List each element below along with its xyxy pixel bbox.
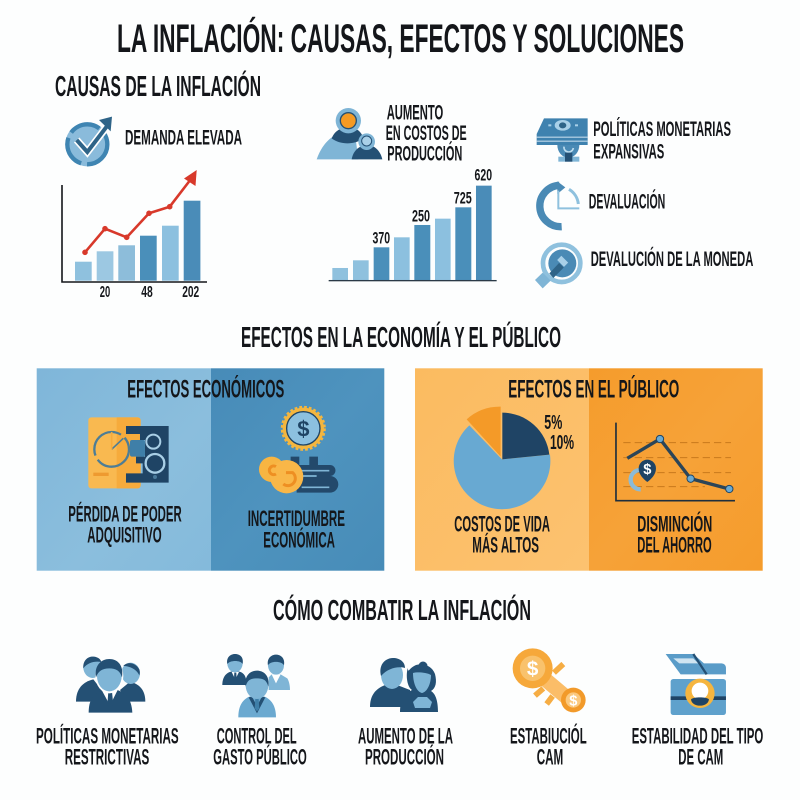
label: disminción del ahorro bbox=[637, 512, 712, 557]
icon: linked coins bbox=[513, 648, 586, 712]
pie labels: 10% bbox=[550, 432, 574, 454]
label: incertidumbre económica: INCERTIDUMBRE bbox=[248, 506, 345, 531]
label: incertidumbre económica bbox=[248, 506, 345, 552]
label: disminción del ahorro: DISMINCIÓN bbox=[637, 512, 712, 537]
bar chart: costos: 250 bbox=[412, 208, 430, 226]
bar chart with red trend line: 20 bbox=[100, 284, 110, 301]
icon: gear coin and pipes: $ bbox=[297, 416, 309, 441]
section: causas de la inflación bbox=[55, 71, 753, 301]
panel: efectos en el público: DEL AHORRO bbox=[637, 532, 712, 557]
line chart: ahorro: $ bbox=[643, 462, 651, 478]
label: políticas monetarias expansivas bbox=[593, 116, 731, 163]
bar chart: costos: 725 bbox=[454, 189, 472, 207]
label: políticas monetarias restrictivas bbox=[36, 723, 179, 769]
line chart: ahorro bbox=[616, 423, 735, 501]
label: políticas monetarias restrictivas: RESTRICTIVAS bbox=[65, 744, 149, 769]
icon: linked coins: $ bbox=[569, 693, 577, 709]
label: aumento de la producción: AUMENTO DE LA bbox=[358, 723, 453, 748]
heading: causas: CAUSAS DE LA INFLACIÓN bbox=[55, 71, 261, 103]
label: aumento de la producción: PRODUCCIÓN bbox=[365, 744, 444, 769]
label: estabilidad del tipo de cam: DE CAM bbox=[678, 744, 723, 769]
bar chart with red trend line: 48 bbox=[141, 284, 153, 301]
label: aumento en costos de producción: AUMENTO bbox=[387, 100, 443, 124]
label: pérdida de poder adquisitivo bbox=[68, 502, 182, 547]
icon: three officials bbox=[222, 654, 290, 717]
icon: man and woman bbox=[370, 658, 438, 712]
icon: money stack bbox=[537, 118, 588, 162]
bar chart: costos: 370 bbox=[373, 229, 390, 247]
panel: efectos en el público bbox=[415, 368, 763, 571]
icon: gear coin and pipes bbox=[259, 408, 338, 493]
panel: efectos económicos bbox=[37, 368, 384, 571]
label: estabilución cam bbox=[510, 723, 587, 769]
bar chart with red trend line bbox=[62, 170, 207, 301]
label: demanda elevada: DEMANDA ELEVADA bbox=[125, 126, 242, 150]
icon: group of three men bbox=[76, 657, 145, 713]
label: costos de vida más altos: MÁS ALTOS bbox=[472, 532, 539, 557]
label: incertidumbre económica: ECONÓMICA bbox=[263, 527, 335, 552]
section: soluciones bbox=[36, 648, 763, 769]
label: costos de vida más altos bbox=[454, 512, 550, 557]
section: causas de la inflación: EN COSTOS DE bbox=[386, 121, 467, 145]
heading: cómo combatir la inflación: CÓMO COMBATIR LA INFLACIÓN bbox=[273, 595, 531, 627]
heading: efectos económicos: EFECTOS ECONÓMICOS bbox=[127, 373, 284, 403]
label: políticas monetarias expansivas: EXPANSIVAS bbox=[593, 139, 664, 163]
icon: check and arrow bbox=[65, 117, 112, 166]
panel: efectos en el público: COSTOS DE VIDA bbox=[454, 512, 550, 537]
label: aumento en costos de producción bbox=[386, 100, 467, 166]
icon: currency dial bbox=[535, 245, 580, 288]
icon: wallet and clock bbox=[88, 417, 169, 488]
label: estabilución cam: ESTABIUCIÓL bbox=[510, 723, 587, 748]
icon: briefcase bbox=[666, 654, 726, 715]
label: estabilidad del tipo de cam bbox=[632, 723, 763, 769]
bar chart: costos bbox=[329, 167, 497, 281]
section: soluciones: GASTO PÚBLICO bbox=[213, 744, 307, 769]
pie labels: 5% bbox=[544, 412, 562, 434]
label: estabilución cam: CAM bbox=[537, 744, 563, 769]
icon: circular arrow devaluation bbox=[540, 181, 579, 227]
label: pérdida de poder adquisitivo: ADQUISITIVO bbox=[87, 522, 162, 547]
section: causas de la inflación: DEVALUACIÓN bbox=[589, 188, 665, 213]
label: aumento en costos de producción: PRODUCCIÓN bbox=[387, 141, 462, 166]
label: pérdida de poder adquisitivo: PÉRDIDA DE PODER bbox=[68, 502, 182, 527]
pie labels bbox=[544, 412, 574, 454]
icon: persons with cost bbox=[317, 108, 382, 159]
label: control del gasto público: CONTROL DEL bbox=[217, 723, 297, 748]
label: aumento de la producción bbox=[358, 723, 453, 769]
bar chart with red trend line: 202 bbox=[182, 284, 199, 301]
icon: linked coins: $ bbox=[527, 658, 539, 681]
label: políticas monetarias restrictivas: POLÍTICAS MONETARIAS bbox=[36, 723, 179, 748]
pie chart bbox=[454, 407, 550, 509]
bar chart: costos: 620 bbox=[475, 167, 492, 185]
label: control del gasto público bbox=[213, 723, 307, 769]
